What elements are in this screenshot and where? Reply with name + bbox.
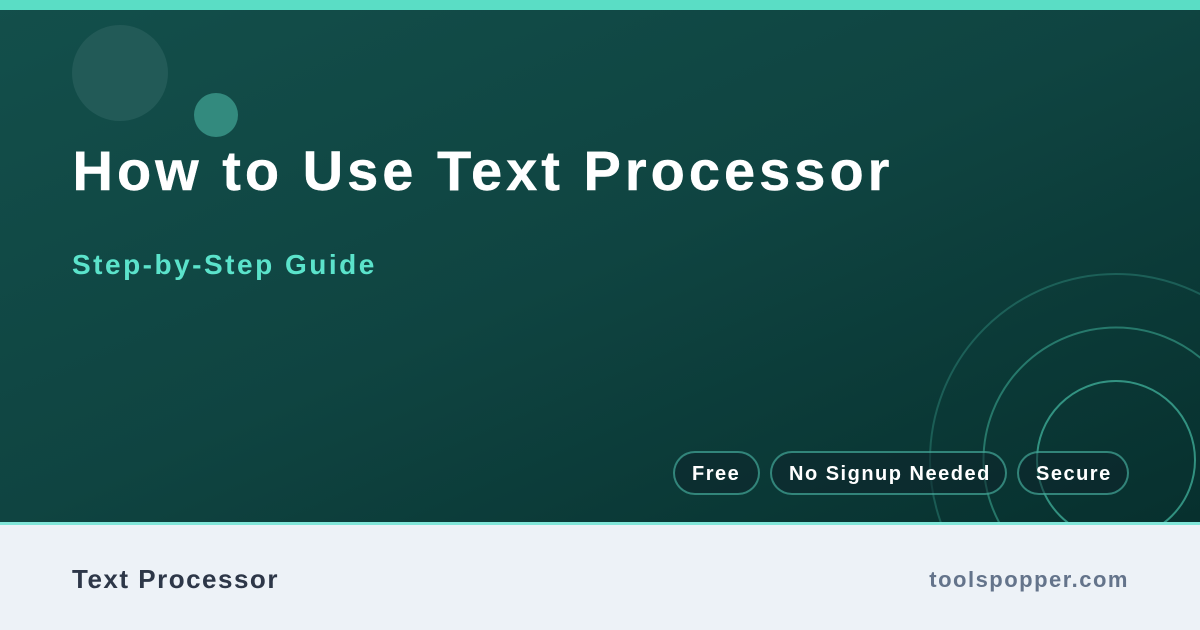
decoration: large circle	[72, 25, 168, 121]
subtitle: Step-by-Step Guide	[72, 249, 377, 280]
accent divider	[0, 522, 1200, 525]
title: How to Use Text Processor	[72, 139, 893, 202]
panel: footer	[0, 525, 1200, 630]
tag: No Signup Needed: No Signup Needed	[789, 463, 991, 485]
tag: Free: Free	[692, 463, 740, 485]
decoration: small circle	[194, 93, 238, 137]
footer website: toolspopper.com	[929, 567, 1129, 592]
footer tool name: Text Processor	[72, 564, 279, 594]
tag: Secure: Secure	[1036, 463, 1112, 485]
feature tags	[673, 451, 1129, 495]
top accent bar	[0, 0, 1200, 10]
tag: No Signup Needed	[770, 451, 1007, 495]
tag: Secure	[1017, 451, 1129, 495]
tag: Free	[673, 451, 760, 495]
